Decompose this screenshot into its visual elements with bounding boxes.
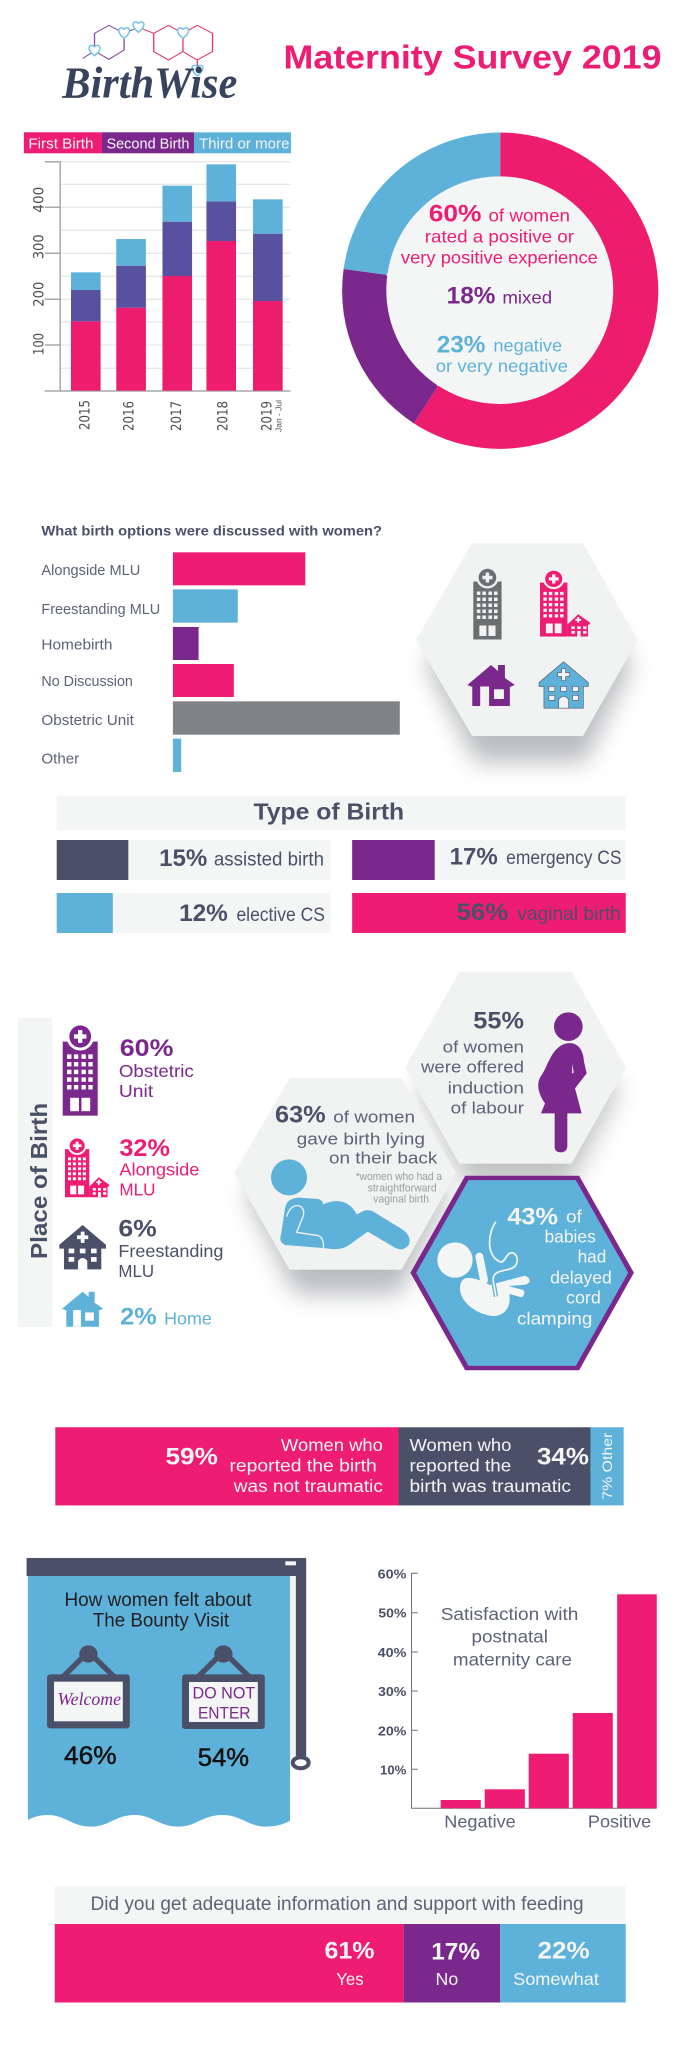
panel: hexagon with place-of-birth icons [416, 543, 638, 762]
stacked bar: traumatic birth: Women who [281, 1435, 383, 1455]
panel: hexagon delayed cord clamping: babies [544, 1226, 596, 1247]
icon: home [467, 665, 515, 706]
icon: do not enter sign: DO NOT [192, 1683, 255, 1702]
panel: place of birth [18, 1018, 223, 1330]
panel: Bounty visit roller blind: The Bounty Visit [93, 1611, 230, 1632]
panel: hexagon birth position [234, 1078, 456, 1294]
bar chart: satisfaction with postnatal care: postnatal [472, 1627, 548, 1647]
bar chart: births per year: 2019 [260, 401, 276, 431]
stat: alongside MLU: MLU [119, 1179, 155, 1199]
panel: type of birth: Type of Birth [253, 798, 404, 824]
legend: birth order [24, 132, 291, 153]
bar chart: satisfaction with postnatal care: Satisfaction with [441, 1604, 578, 1624]
stat: emergency CS: emergency CS [506, 848, 622, 869]
stacked bar: traumatic birth: reported the [409, 1456, 511, 1476]
stat: assisted birth: 15% [159, 845, 207, 872]
bar chart: satisfaction with postnatal care: 10% [380, 1762, 407, 1777]
bar chart: birth options discussed: Homebirth [41, 636, 112, 653]
bar chart: births per year: 2015 [77, 400, 93, 430]
title: Maternity Survey 2019 [284, 38, 662, 75]
panel: feeding support: No [436, 1969, 458, 1989]
bar chart: births per year [32, 162, 290, 432]
stat: alongside MLU [65, 1135, 200, 1199]
stacked bar: traumatic birth: was not traumatic [233, 1476, 383, 1496]
panel: hexagon birth position: straightforward [368, 1183, 437, 1195]
panel: hexagon birth position: 63% [275, 1101, 326, 1128]
stat: emergency CS [352, 840, 626, 880]
panel: Bounty visit roller blind: How women felt about [64, 1590, 252, 1611]
bar chart: satisfaction with postnatal care [378, 1566, 657, 1831]
stat: vaginal birth [352, 893, 626, 933]
panel: hexagon delayed cord clamping: clamping [517, 1308, 592, 1328]
legend: birth order: Second Birth [106, 135, 190, 152]
bar chart: satisfaction with postnatal care: 40% [378, 1645, 407, 1660]
stat: home: Home [164, 1308, 212, 1328]
bar chart: birth options discussed: Obstetric Unit [41, 712, 135, 729]
bar chart: births per year: 300 [32, 234, 48, 259]
stat: obstetric unit [63, 1022, 194, 1116]
panel: hexagon induction of labour: induction [448, 1078, 524, 1097]
donut chart: rating of experience: negative [493, 336, 562, 356]
stat: emergency CS: 17% [450, 843, 498, 870]
stat: freestanding MLU [59, 1215, 223, 1281]
panel: hexagon birth position: of women [333, 1107, 415, 1126]
bar chart: birth options discussed: No Discussion [41, 673, 133, 690]
bar chart: satisfaction with postnatal care: Positive [588, 1811, 651, 1831]
panel: hexagon delayed cord clamping: delayed [550, 1267, 612, 1287]
panel: hexagon delayed cord clamping: had [578, 1247, 606, 1267]
panel: hexagon birth position: vaginal birth [373, 1193, 429, 1205]
bar chart: satisfaction with postnatal care: Negative [444, 1811, 516, 1831]
bar chart: births per year: 2017 [169, 401, 185, 431]
icon: obstetric unit tower [473, 566, 502, 640]
stat: alongside MLU: 32% [119, 1135, 170, 1162]
stat: home: 2% [120, 1303, 157, 1330]
panel: feeding support: 61% [325, 1937, 375, 1964]
panel: place of birth: Place of Birth [26, 1103, 52, 1259]
bar chart: satisfaction with postnatal care: 30% [378, 1684, 407, 1699]
stat: vaginal birth: vaginal birth [517, 904, 621, 925]
bar chart: birth options discussed [41, 552, 400, 772]
stat: vaginal birth: 56% [456, 899, 508, 926]
icon: alongside MLU [540, 569, 590, 637]
logo: BirthWise: BirthWise [61, 59, 237, 107]
panel: feeding support: Yes [336, 1969, 364, 1989]
donut chart: rating of experience [342, 132, 658, 449]
stat: obstetric unit: Obstetric [119, 1061, 194, 1081]
panel: Bounty visit roller blind: 54% [198, 1744, 249, 1772]
stat: assisted birth: assisted birth [214, 849, 324, 870]
panel: hexagon induction of labour: were offered [420, 1058, 524, 1077]
donut chart: rating of experience: rated a positive or [425, 226, 574, 246]
stacked bar: traumatic birth: birth was traumatic [409, 1476, 571, 1496]
bar chart: births per year: 200 [32, 282, 48, 307]
donut chart: rating of experience: 23% [437, 331, 485, 358]
donut chart: rating of experience: mixed [502, 287, 552, 307]
legend: birth order: First Birth [28, 135, 94, 152]
panel: hexagon induction of labour [405, 972, 626, 1186]
stat: elective CS: elective CS [236, 905, 325, 926]
icon: fetus with cord [437, 1222, 530, 1316]
bar chart: births per year: 400 [32, 187, 48, 213]
panel: hexagon induction of labour: of labour [451, 1098, 524, 1117]
bar chart: satisfaction with postnatal care: 20% [378, 1723, 407, 1738]
panel: hexagon delayed cord clamping: 43% [507, 1203, 558, 1230]
donut chart: rating of experience: of women [488, 206, 570, 226]
donut chart: rating of experience: 18% [447, 282, 495, 309]
legend: birth order: Third or more [199, 135, 289, 152]
panel: hexagon birth position: *women who had a [356, 1171, 443, 1183]
bar chart: birth options discussed: Freestanding MLU [41, 601, 160, 618]
panel: type of birth [57, 796, 626, 933]
stat: elective CS [57, 893, 330, 933]
bar chart: birth options discussed: Alongside MLU [41, 562, 140, 579]
bar chart: birth options discussed: Other [41, 750, 79, 767]
panel: feeding support: Did you get adequate information and support with feeding [91, 1894, 584, 1915]
panel: hexagon induction of labour: of women [443, 1037, 524, 1056]
icon: freestanding MLU [539, 662, 588, 708]
stat: home [62, 1292, 212, 1330]
bar chart: satisfaction with postnatal care: 60% [378, 1566, 407, 1581]
panel: hexagon birth position: on their back [329, 1149, 438, 1168]
stat: alongside MLU: Alongside [119, 1159, 200, 1179]
panel: feeding support: Somewhat [513, 1969, 599, 1989]
bar chart: satisfaction with postnatal care: maternity care [453, 1649, 572, 1669]
heading: birth options: What birth options were discussed with women? [41, 523, 382, 539]
donut chart: rating of experience: or very negative [436, 356, 568, 376]
bar chart: births per year: 100 [32, 333, 48, 355]
stacked bar: traumatic birth: 34% [537, 1443, 589, 1470]
panel: Bounty visit roller blind: 46% [64, 1742, 117, 1770]
icon: do not enter sign: ENTER [198, 1703, 250, 1722]
stacked bar: traumatic birth: 7% Other [599, 1432, 615, 1500]
panel: hexagon delayed cord clamping [413, 1178, 631, 1368]
panel: hexagon induction of labour: 55% [473, 1007, 524, 1034]
stat: freestanding MLU: 6% [118, 1215, 157, 1242]
panel: hexagon birth position: gave birth lying [297, 1129, 425, 1148]
bar chart: satisfaction with postnatal care: 50% [378, 1606, 407, 1621]
icon: do not enter sign [182, 1645, 265, 1729]
bar chart: births per year: 2018 [215, 401, 231, 431]
stacked bar: traumatic birth [55, 1427, 624, 1505]
icon: welcome sign: Welcome [57, 1689, 121, 1709]
stacked bar: traumatic birth: reported the birth [230, 1456, 377, 1476]
panel: feeding support: 17% [431, 1938, 480, 1965]
stat: freestanding MLU: Freestanding [118, 1241, 223, 1261]
donut chart: rating of experience: very positive experience [401, 247, 598, 267]
icon: welcome sign [47, 1645, 130, 1728]
panel: hexagon delayed cord clamping: cord [566, 1288, 601, 1308]
panel: Bounty visit roller blind [27, 1558, 309, 1827]
panel: feeding support [55, 1886, 626, 2002]
stat: elective CS: 12% [179, 900, 228, 927]
donut chart: rating of experience: 60% [429, 201, 481, 228]
bar chart: births per year: Jan - Jul [275, 400, 284, 432]
bar chart: births per year: 2016 [122, 401, 138, 431]
logo: BirthWise [61, 22, 237, 107]
stat: freestanding MLU: MLU [118, 1261, 154, 1281]
stat: obstetric unit: 60% [120, 1035, 173, 1062]
panel: feeding support: 22% [537, 1937, 590, 1964]
stacked bar: traumatic birth: Women who [409, 1435, 511, 1455]
stat: obstetric unit: Unit [119, 1081, 153, 1101]
icon: pregnant woman [538, 1012, 587, 1152]
panel: hexagon delayed cord clamping: of [566, 1207, 582, 1227]
icon: woman lying on back [271, 1159, 410, 1249]
stat: assisted birth [57, 840, 330, 880]
stacked bar: traumatic birth: 59% [166, 1443, 218, 1470]
